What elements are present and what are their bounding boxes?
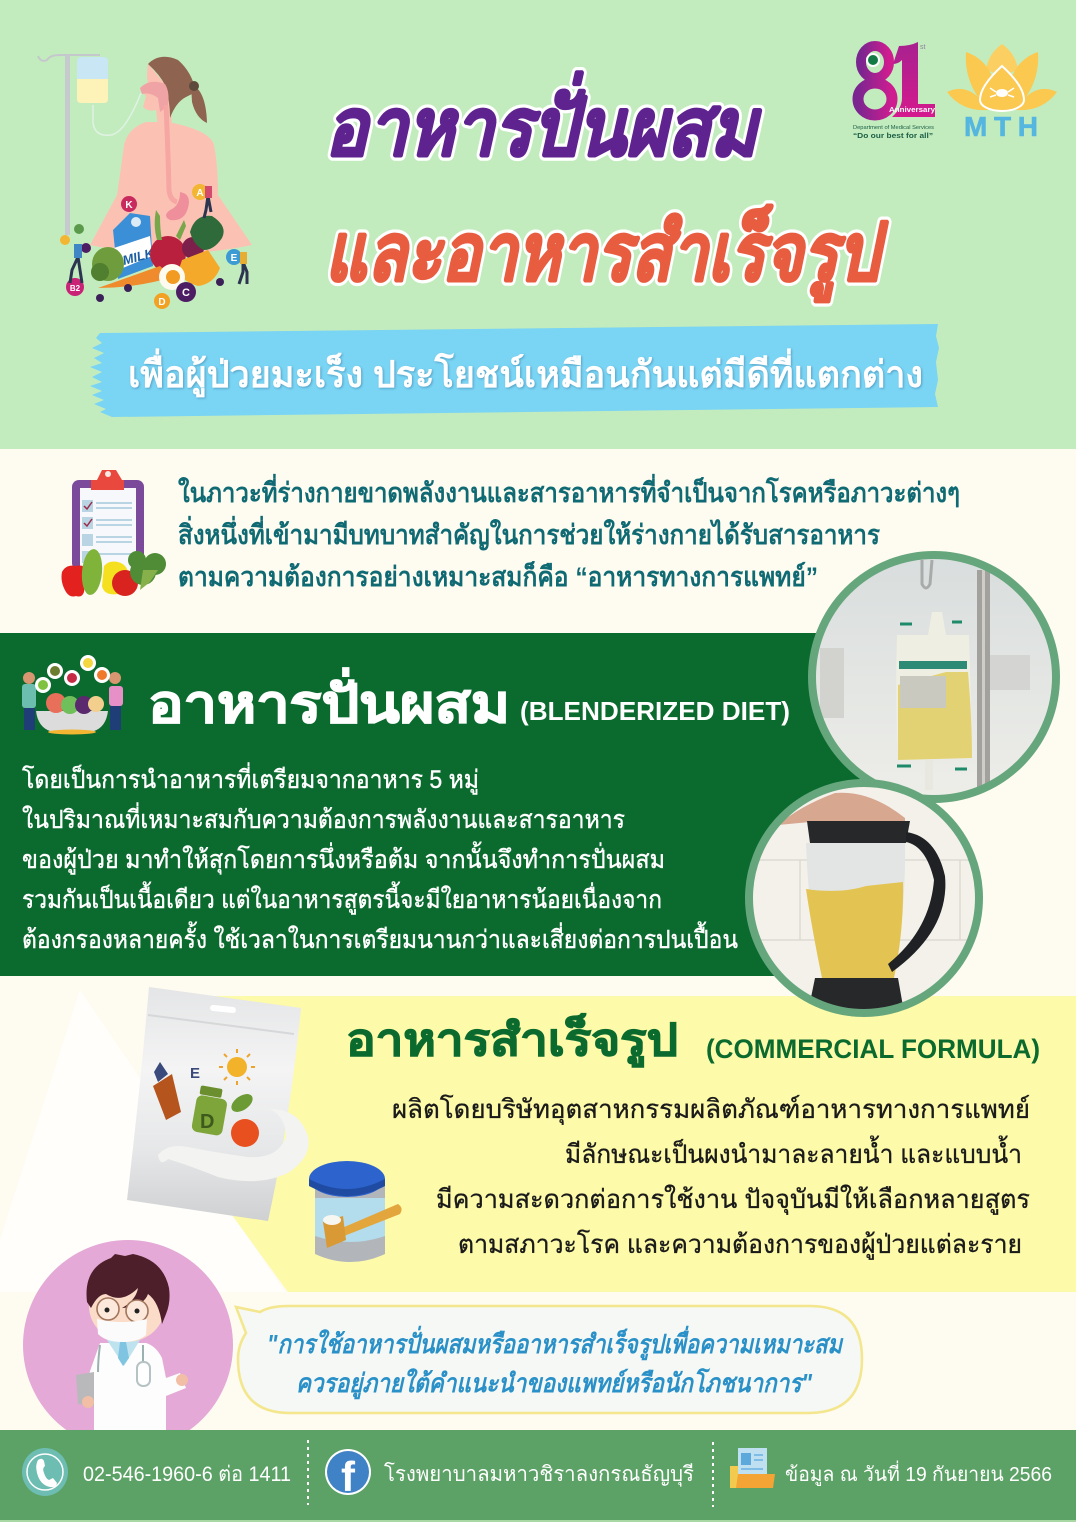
body text: ในปริมาณที่เหมาะสมกับความต้องการพลังงานและสารอาหาร: [22, 802, 625, 834]
illustration: patient with feeding tube and food: A: [196, 188, 204, 199]
body text: ต้องกรองหลายครั้ง ใช้เวลาในการเตรียมนานกว่าและเสี่ยงต่อการปนเปื้อน: [22, 921, 738, 954]
body text: มีความสะดวกต่อการใช้งาน ปัจจุบันมีให้เลือกหลายสูตร: [436, 1184, 1030, 1215]
body text: [392, 1094, 1030, 1260]
divider: [712, 1442, 714, 1507]
intro text: ในภาวะที่ร่างกายขาดพลังงานและสารอาหารที่จำเป็นจากโรคหรือภาวะต่างๆ: [178, 473, 960, 508]
logo: 81st anniversary: st: [920, 44, 926, 51]
title: และอาหารสำเร็จรูป: [325, 204, 889, 303]
logo: MTH lotus: [947, 44, 1057, 142]
photo: feeding bag: [810, 553, 1060, 803]
illustration: patient with feeding tube and food: [38, 55, 252, 309]
logo: 81st anniversary: Department of Medical Services: [853, 125, 935, 131]
logo: 81st anniversary: “Do our best for all”: [853, 131, 933, 140]
logo: MTH lotus: MTH: [964, 111, 1038, 142]
icon: facebook: f: [341, 1453, 356, 1500]
header panel: [0, 0, 1076, 449]
title: และอาหารสำเร็จรูป: [325, 204, 889, 303]
facebook page name: โรงพยาบาลมหาวชิราลงกรณธัญบุรี: [384, 1462, 694, 1487]
illustration: formula can with scoop: [309, 1161, 402, 1262]
logo: 81st anniversary: Anniversary: [889, 105, 936, 114]
body text: ของผู้ป่วย มาทำให้สุกโดยการนึ่งหรือต้ม จากนั้นจึงทำการปั่นผสม: [22, 841, 665, 875]
intro text: [178, 473, 960, 592]
divider: [307, 1440, 309, 1505]
icon: facebook: [325, 1449, 371, 1500]
illustration: silver pouch with vitamins: D: [200, 1111, 214, 1133]
panel: blenderized diet: [0, 633, 860, 976]
body text: มีลักษณะเป็นผงนำมาละลายน้ำ และแบบน้ำ: [565, 1135, 1022, 1169]
illustration: silver pouch with vitamins: E: [190, 1065, 200, 1082]
title: อาหารปั่นผสม: [325, 71, 762, 172]
intro text: ตามความต้องการอย่างเหมาะสมก็คือ “อาหารทางการแพทย์”: [178, 559, 818, 592]
subtitle brush banner: [90, 324, 939, 417]
icon: people with salad bowl: [22, 655, 123, 734]
icon: phone: [22, 1448, 68, 1496]
illustration: patient with feeding tube and food: E: [231, 253, 238, 264]
title: อาหารปั่นผสม: [325, 71, 762, 172]
callout text: [267, 1325, 844, 1400]
body text: โดยเป็นการนำอาหารที่เตรียมจากอาหาร 5 หมู่: [22, 762, 479, 795]
icon: folder: [730, 1448, 775, 1488]
body text: ตามสภาวะโรค และความต้องการของผู้ป่วยแต่ละราย: [458, 1229, 1022, 1260]
logo: 81st anniversary: [853, 42, 936, 140]
body text: ผลิตโดยบริษัทอุตสาหกรรมผลิตภัณฑ์อาหารทางการแพทย์: [392, 1094, 1030, 1125]
illustration: silver pouch with vitamins: [127, 987, 309, 1221]
illustration: patient with feeding tube and food: C: [182, 287, 190, 299]
callout text: ควรอยู่ภายใต้คำแนะนำของแพทย์หรือนักโภชนาการ": [296, 1367, 813, 1400]
callout text: "การใช้อาหารปั่นผสมหรืออาหารสำเร็จรูปเพื่อความเหมาะสม: [267, 1325, 844, 1361]
update date: ข้อมูล ณ วันที่ 19 กันยายน 2566: [785, 1460, 1052, 1487]
panel: commercial formula: [0, 987, 1076, 1292]
icon: clipboard with vegetables: [62, 470, 166, 596]
illustration: doctor: [23, 1240, 233, 1450]
body text: รวมกันเป็นเนื้อเดียว แต่ในอาหารสูตรนี้จะมีใยอาหารน้อยเนื่องจาก: [22, 881, 662, 915]
footer bar: [0, 1430, 1076, 1522]
illustration: patient with feeding tube and food: B2: [70, 284, 81, 293]
illustration: patient with feeding tube and food: MILK: [121, 245, 157, 268]
phone number: 02-546-1960-6 ต่อ 1411: [83, 1463, 291, 1486]
section heading english: (COMMERCIAL FORMULA): [706, 1034, 1040, 1064]
subtitle text: เพื่อผู้ป่วยมะเร็ง ประโยชน์เหมือนกันแต่มีดีที่แตกต่าง: [128, 348, 923, 398]
title: [325, 71, 889, 303]
photo: blender with yellow mixture: [745, 780, 985, 1020]
section heading: อาหารสำเร็จรูป: [346, 1013, 678, 1067]
body text: [22, 762, 738, 954]
section heading english: (BLENDERIZED DIET): [520, 696, 790, 726]
callout: speech bubble: [236, 1306, 862, 1413]
section heading: อาหารปั่นผสม: [148, 668, 510, 734]
illustration: patient with feeding tube and food: K: [125, 200, 133, 211]
illustration: patient with feeding tube and food: D: [158, 297, 166, 308]
intro text: สิ่งหนึ่งที่เข้ามามีบทบาทสำคัญในการช่วยให้ร่างกายได้รับสารอาหาร: [178, 515, 880, 551]
